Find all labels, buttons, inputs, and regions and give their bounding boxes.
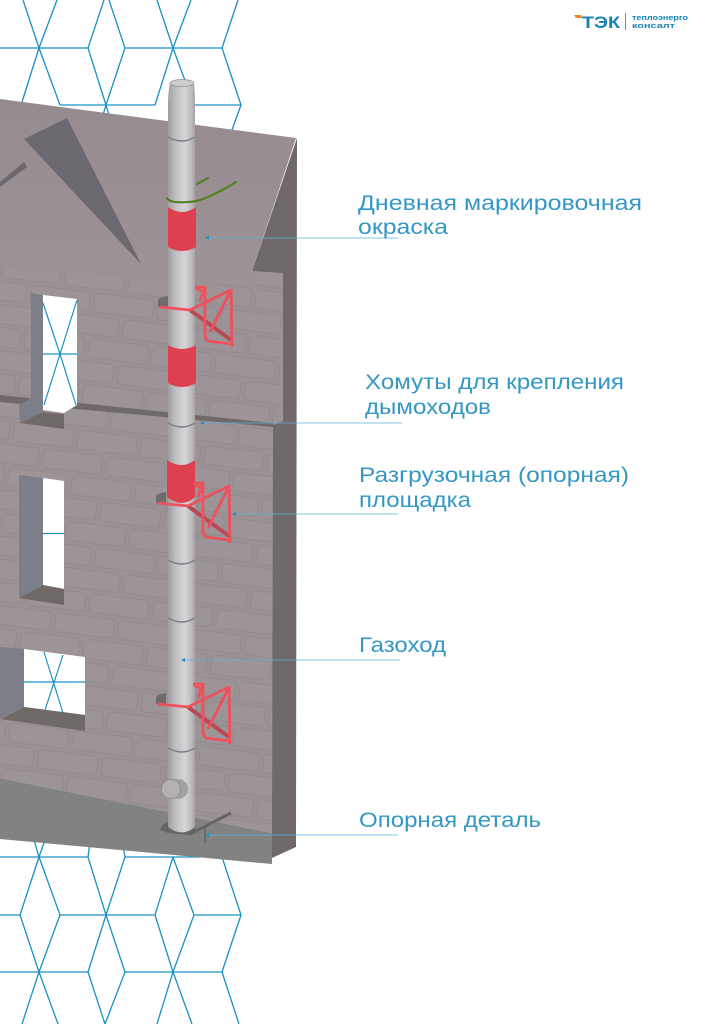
leader 5 [205, 833, 398, 837]
support bracket 1 [158, 286, 232, 347]
roof [0, 99, 296, 287]
label: unloading platform: площадка [359, 489, 471, 512]
brick wall [0, 255, 283, 833]
green wire [167, 178, 236, 202]
label: flue clamps: дымоходов [365, 396, 491, 419]
roof shadow [24, 118, 141, 264]
red marking band 3 [167, 460, 195, 503]
logo orange mark [574, 15, 583, 18]
red marking band 1 [168, 207, 196, 251]
lattice pattern top [0, 0, 241, 130]
floor slab [0, 778, 272, 864]
label: daytime marking paint: Дневная маркировочная [358, 192, 642, 215]
leader 2 [200, 421, 402, 425]
support bracket 3 [156, 683, 230, 744]
label: flue clamps [365, 371, 624, 419]
roof small shadow [0, 162, 27, 187]
label: unloading platform [359, 464, 629, 512]
window 1 [19, 293, 77, 429]
base shadow and support part [160, 813, 231, 843]
label: flue: Газоход [359, 634, 446, 657]
label: daytime marking paint [358, 192, 642, 239]
wall ledge [0, 395, 273, 427]
window 2 [19, 475, 64, 605]
leader 3 [232, 512, 398, 516]
window 3 [0, 647, 85, 731]
logo text: теплоэнерго [632, 13, 688, 22]
building side wall [253, 138, 297, 858]
label: flue clamps: Хомуты для крепления [365, 371, 624, 394]
label: support part: Опорная деталь [359, 809, 541, 832]
leader lines [181, 236, 402, 837]
pipe top opening [170, 80, 194, 86]
building [0, 99, 297, 864]
support bracket 2 [156, 482, 230, 543]
logo divider [624, 13, 627, 30]
logo [574, 13, 688, 32]
logo: консалт [632, 21, 675, 30]
leader 4 [181, 658, 400, 662]
lattice pattern bottom [0, 840, 241, 1024]
red marking band 2 [168, 345, 196, 387]
pipe clamps [168, 137, 195, 752]
leader 1 [205, 236, 398, 240]
chimney flue pipe [167, 80, 196, 832]
label: daytime marking paint: окраска [358, 216, 448, 239]
logo letters: ТЭК [582, 13, 621, 32]
pipe branch stub [162, 779, 188, 799]
label: unloading platform: Разгрузочная (опорная) [359, 464, 629, 487]
